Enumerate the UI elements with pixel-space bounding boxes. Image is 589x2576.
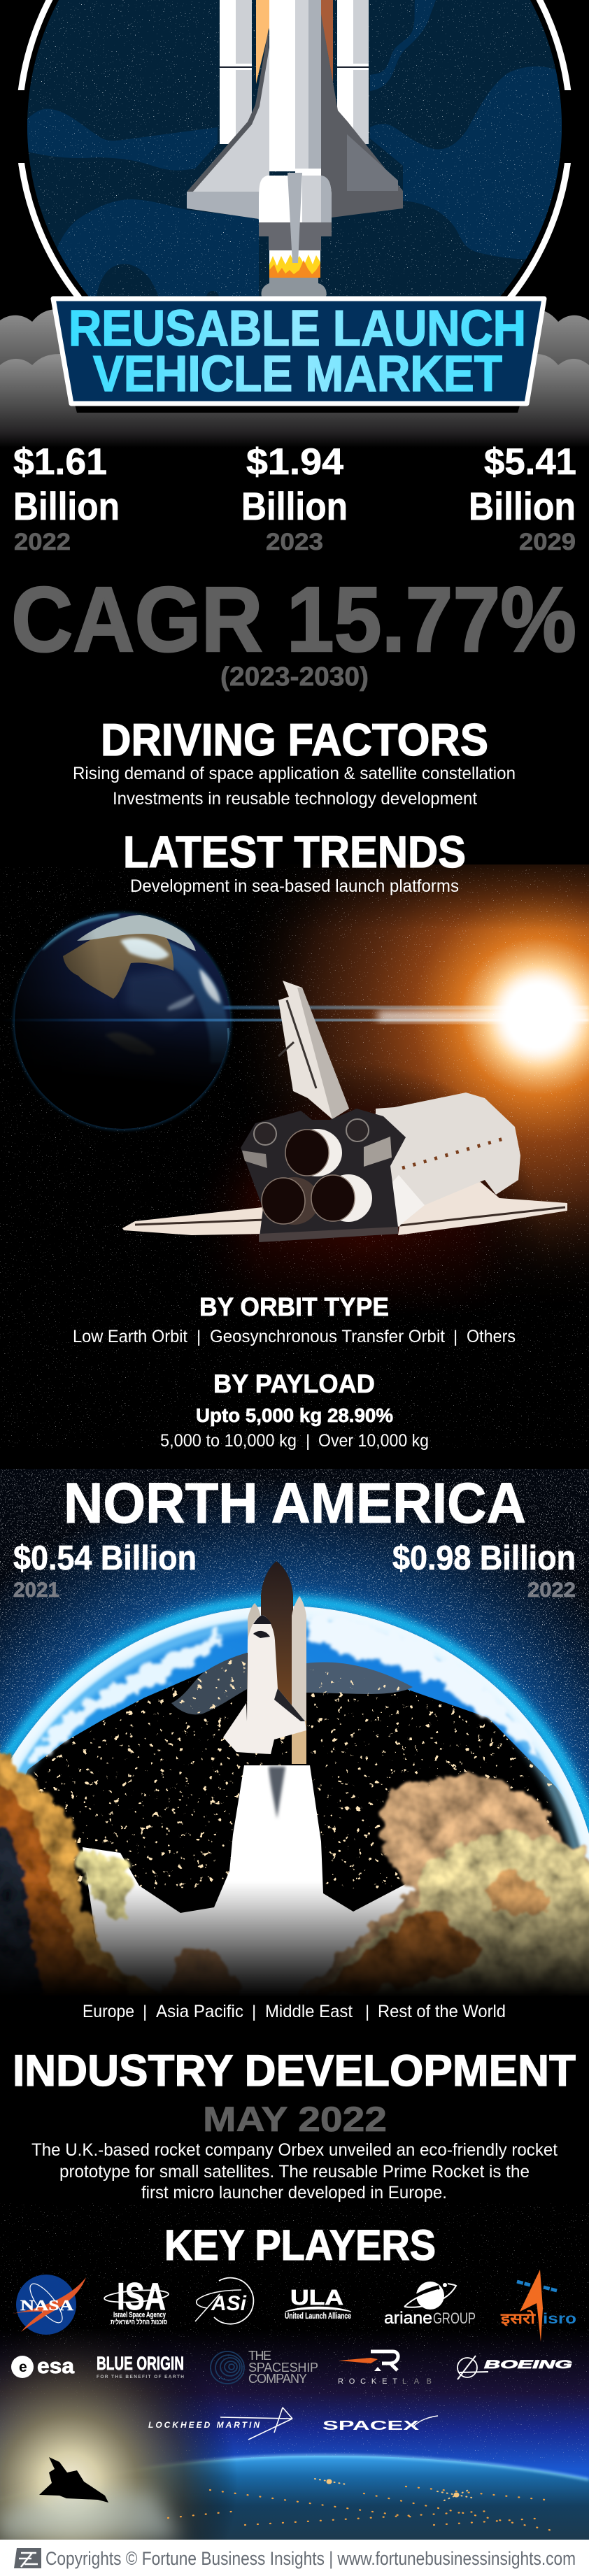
logo: ISRO: isro: [543, 2311, 576, 2327]
stat: 2023: [241, 441, 348, 555]
porthole ring: [19, 0, 570, 401]
logo: ULA: [285, 2285, 351, 2321]
stat: 2029: Billion: [469, 484, 576, 528]
clouds behind title: [0, 309, 589, 448]
shuttle: solid rocket boosters: [220, 0, 369, 144]
regions list: Europe: [83, 2002, 134, 2021]
tail fin: [288, 173, 302, 263]
logo: The Spaceship Company: COMPANY: [248, 2372, 307, 2386]
logo: Lockheed Martin: LOCKHEED MARTIN: [148, 2420, 260, 2430]
vertical tail: [278, 981, 349, 1119]
white cloud band: [120, 938, 169, 960]
shuttle: external tank: [256, 0, 333, 84]
ocean and right limb: [164, 941, 229, 1063]
stat: 2021: 2021: [13, 1579, 59, 1602]
stat: 2029: 2029: [519, 529, 576, 555]
logo: ESA: [11, 2354, 75, 2378]
orbit type list: Geosynchronous Transfer Orbit: [210, 1327, 445, 1346]
payload list: Over 10,000 kg: [318, 1431, 429, 1451]
stat: 2023: $1.94: [246, 441, 344, 483]
orbit type list: [73, 1327, 516, 1346]
stat: 2022: $1.61: [13, 441, 107, 483]
payload list: [160, 1431, 429, 1451]
stars: [21, 0, 568, 301]
exhaust plume: [83, 1765, 490, 2000]
logo: ISA: ISA: [117, 2275, 166, 2318]
city lights: [21, 1658, 553, 1895]
stat: 2029: $5.41: [484, 441, 576, 483]
stat: 2022: Billion: [13, 484, 120, 528]
payload share: Upto 5,000 kg 28.90%: [196, 1404, 393, 1426]
earth limb: [0, 2456, 589, 2540]
earth: [0, 1589, 589, 1942]
right wing: [398, 1182, 567, 1235]
external tank: [261, 1561, 293, 1721]
stat: 2021: $0.54 Billion: [13, 1539, 197, 1577]
regions list: |: [143, 2002, 147, 2021]
logo: ASI: ASi: [211, 2292, 247, 2315]
logo: Rocket Lab: [338, 2351, 432, 2386]
development text: The U.K.-based rocket company Orbex unveiled an eco-friendly rocket: [31, 2140, 558, 2160]
shuttle: orbiter body: [259, 0, 332, 250]
space backdrop: [27, 0, 562, 297]
heading: north america: NORTH AMERICA: [64, 1472, 526, 1535]
shuttle: delta wings: [187, 14, 403, 219]
launching shuttle stack: [223, 1561, 306, 1764]
heading: driving factors: DRIVING FACTORS: [101, 714, 488, 765]
logo: ESA: e: [19, 2359, 27, 2375]
footer bar: [0, 2540, 589, 2576]
land at the terminator: [171, 1653, 247, 1714]
logo: ISA: Israel Space Agency: [113, 2311, 166, 2319]
title text: REUSABLE LAUNCH: [69, 301, 526, 357]
driving factors text: Rising demand of space application & satellite constellation: [73, 764, 516, 783]
orbit type list: Others: [467, 1327, 516, 1346]
development text: [31, 2140, 558, 2203]
heading: by payload: BY PAYLOAD: [213, 1369, 375, 1398]
stars: [0, 2203, 589, 2462]
logo: ArianeGroup: GROUP: [433, 2310, 476, 2327]
stat: 2021: [13, 1539, 197, 1602]
regions list: Rest of the World: [378, 2002, 506, 2021]
stat: 2023: Billion: [241, 484, 348, 528]
driving factors text: Investments in reusable technology development: [113, 789, 477, 809]
panel: space shuttle photo: [0, 864, 589, 1448]
pale haze on earth: [0, 2493, 182, 2540]
orbit type list: |: [197, 1328, 201, 1346]
logo: ArianeGroup: [384, 2282, 476, 2328]
right booster: [292, 1596, 306, 1763]
icon: Fortune Business Insights logo: [14, 2548, 41, 2568]
logo: ESA: esa: [37, 2354, 75, 2378]
payload list: 5,000 to 10,000 kg: [160, 1431, 297, 1451]
heading: by orbit type: BY ORBIT TYPE: [199, 1293, 389, 1321]
logo: ArianeGroup: ariane: [384, 2309, 432, 2328]
shuttle silhouette: [39, 2457, 108, 2503]
logo: The Spaceship Company: SPACESHIP: [248, 2361, 318, 2375]
regions list: |: [365, 2002, 369, 2021]
cloud systems: [27, 1633, 224, 1763]
title text: VEHICLE MARKET: [93, 346, 502, 402]
driving factors text: [73, 764, 516, 809]
title text: [69, 301, 526, 402]
stars: [0, 867, 589, 1448]
stat: 2022: 2022: [14, 529, 71, 555]
logo: Blue Origin: [97, 2353, 184, 2379]
plume shadow: [269, 1767, 285, 1819]
logo: SpaceX: [322, 2416, 438, 2433]
logo: Lockheed Martin: [148, 2407, 292, 2440]
logo: Rocket Lab: ROCKET: [338, 2377, 397, 2386]
regions list: Middle East: [265, 2002, 353, 2021]
stat: 2023: 2023: [266, 529, 323, 555]
left booster: [248, 1603, 261, 1693]
sun glow: [0, 2329, 238, 2540]
logo: Blue Origin: BLUE ORIGIN: [97, 2353, 184, 2374]
rocket flame: [269, 250, 320, 278]
panel: bottom earth scene: [0, 2203, 589, 2542]
orbiter: [223, 1615, 306, 1754]
logo: Boeing: [457, 2356, 572, 2379]
left wing: [122, 1207, 265, 1235]
night lights: [168, 2479, 560, 2532]
regions list: Asia Pacific: [156, 2002, 243, 2021]
heading: industry development: INDUSTRY DEVELOPMENT: [13, 2047, 576, 2095]
logo: The Spaceship Company: THE: [248, 2349, 271, 2363]
logo: NASA: [12, 2275, 86, 2335]
panel: hero illustration: [18, 0, 571, 297]
stat: 2022: $0.98 Billion: [392, 1539, 576, 1577]
regions list: |: [252, 2002, 256, 2021]
orbit type list: |: [453, 1328, 457, 1346]
title banner: [53, 299, 544, 404]
logo: ISA: [104, 2275, 169, 2326]
logo: ISRO: [500, 2270, 576, 2342]
sun flare: [0, 978, 589, 1055]
development text: first micro launcher developed in Europe.: [141, 2183, 447, 2203]
stat: 2022: [392, 1539, 576, 1602]
fuselage: [376, 1093, 520, 1230]
stat: 2022: 2022: [527, 1579, 576, 1602]
CAGR period: (2023-2030): [220, 662, 369, 692]
logo: The Spaceship Company: [211, 2349, 318, 2386]
stat: 2029: [469, 441, 576, 555]
bright limb: [10, 1606, 589, 1863]
logo: SpaceX: SPACEX: [322, 2419, 419, 2433]
logo: ISA: סוכנות החלל הישראלית: [111, 2318, 167, 2326]
development text: prototype for small satellites. The reusable Prime Rocket is the: [59, 2162, 530, 2182]
latest trends text: Development in sea-based launch platforms: [130, 876, 459, 896]
payload list: |: [306, 1432, 310, 1451]
smoke clouds: [0, 1728, 589, 2000]
logo: Blue Origin: FOR THE BENEFIT OF EARTH: [97, 2375, 184, 2379]
engine nozzles: [242, 1119, 392, 1225]
date: MAY 2022: [203, 2100, 387, 2139]
exhaust smoke: [261, 278, 327, 297]
aft section: [241, 1109, 406, 1242]
orbit type list: Low Earth Orbit: [73, 1327, 187, 1346]
panel: north america launch scene: [0, 1469, 589, 1993]
logo: Rocket Lab: LAB: [402, 2377, 432, 2386]
regions list: [83, 2002, 506, 2021]
blue crescent: [11, 1606, 588, 1828]
lower fade: [0, 1881, 589, 2014]
logo: NASA: NASA: [20, 2297, 74, 2314]
earth: [13, 912, 232, 1130]
logo: ULA: ULA: [290, 2285, 343, 2310]
heading: key players: KEY PLAYERS: [164, 2221, 436, 2269]
shuttle photo: [122, 981, 567, 1242]
stat: 2022: [13, 441, 120, 555]
logo: ISRO: इसरो: [500, 2310, 537, 2327]
heading: latest trends: LATEST TRENDS: [123, 827, 466, 877]
star field: [0, 1469, 589, 1831]
logo: ULA: United Launch Alliance: [285, 2311, 351, 2321]
logo: ASI: [195, 2278, 253, 2324]
logo: Boeing: BOEING: [484, 2358, 572, 2371]
continents: [63, 934, 173, 999]
